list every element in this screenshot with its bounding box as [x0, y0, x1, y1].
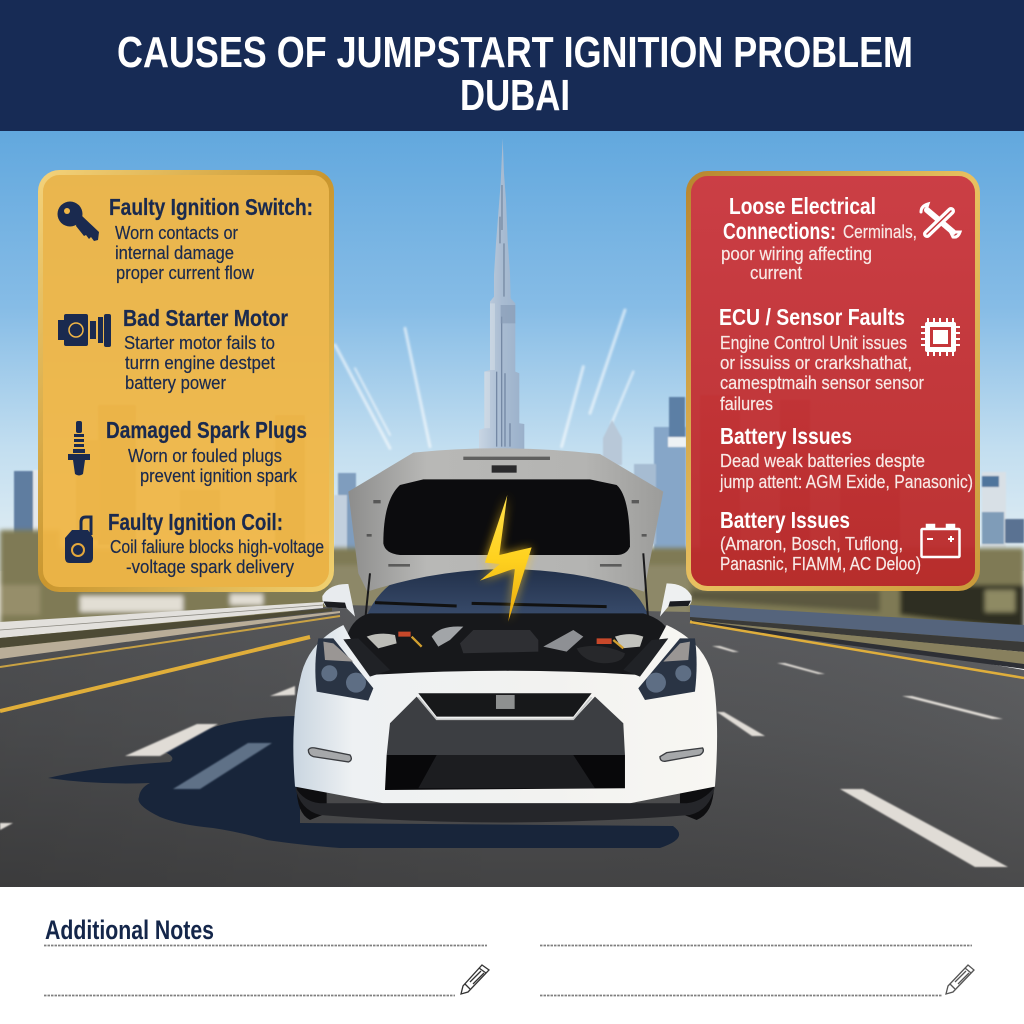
icon: pencil left	[461, 965, 489, 994]
text: ignition coil description	[110, 536, 324, 577]
fog lights	[308, 748, 703, 762]
text: ignition switch description	[115, 222, 255, 283]
icon: key	[58, 202, 99, 241]
sports car with open hood	[293, 448, 717, 822]
lane dashes	[0, 646, 1008, 867]
text: ignition coil description: -voltage spark delivery	[126, 556, 295, 577]
text: battery brands: Panasnic, FIAMM, AC Deloo)	[720, 553, 921, 574]
headlights	[315, 638, 697, 701]
city skyline	[14, 395, 1024, 573]
text: ecu description: failures	[720, 393, 773, 414]
note lines	[44, 946, 972, 996]
white body	[293, 625, 717, 803]
road surface	[0, 605, 1024, 887]
text: spark plugs description: prevent ignition spark	[140, 465, 298, 486]
car shadow on road	[48, 716, 679, 848]
text: starter motor description	[124, 332, 275, 393]
icon: ignition coil	[65, 517, 93, 563]
text: ecu description: Engine Control Unit issues	[720, 332, 907, 353]
tyres	[297, 787, 714, 820]
engine bay	[347, 613, 670, 675]
heading: loose electrical connections	[723, 193, 876, 244]
sky background	[0, 131, 1024, 571]
icon: starter motor	[58, 314, 111, 347]
icon: pencil right	[946, 965, 974, 994]
left roadside barrier and shoulder	[0, 602, 340, 711]
heading: ecu sensor faults: ECU / Sensor Faults	[719, 304, 905, 330]
text: spark plugs description	[128, 445, 298, 486]
text: ignition switch description: Worn contacts or	[115, 222, 238, 243]
heading: battery issues: Battery Issues	[720, 423, 852, 449]
panel: left causes	[40, 172, 332, 590]
text: starter motor description: battery power	[125, 372, 226, 393]
text: ecu description	[720, 332, 924, 414]
panel: additional notes	[0, 887, 1024, 1024]
text: battery issues description	[719, 450, 973, 492]
text: ignition switch description: internal damage	[115, 242, 234, 263]
mirrors	[322, 583, 692, 617]
heading: faulty ignition coil: Faulty Ignition Coil:	[108, 509, 283, 535]
lightning bolt glow	[480, 495, 532, 622]
icon: battery	[922, 525, 960, 557]
front splitter	[295, 787, 715, 822]
text: ignition switch description: proper current flow	[116, 262, 255, 283]
open hood	[348, 448, 663, 592]
heading: loose electrical connections: Loose Electrical	[729, 193, 876, 219]
heading: damaged spark plugs: Damaged Spark Plugs	[106, 417, 307, 443]
lightning bolt	[480, 495, 532, 622]
icon: microchip	[921, 318, 960, 356]
front grille	[385, 693, 625, 790]
text: ignition coil description: Coil faliure blocks high-voltage	[110, 536, 324, 557]
text: battery issues description: jump attent: AGM Exide, Panasonic)	[719, 471, 973, 492]
heading: battery issues brands: Battery Issues	[720, 507, 850, 533]
text: starter motor description: turrn engine destpet	[125, 352, 275, 373]
icon: spark plug	[68, 421, 90, 476]
icon: crossed wrench and screwdriver	[921, 204, 960, 237]
title	[117, 29, 913, 120]
text: battery brands	[720, 533, 921, 574]
heading: additional notes: Additional Notes	[45, 915, 214, 945]
right roadside guardrail and lane line	[690, 605, 1024, 678]
desert ground band	[0, 530, 1024, 650]
heading: loose electrical connections: Connections:	[723, 218, 836, 244]
text: loose connections description: poor wiring affecting	[721, 243, 872, 264]
text: battery issues description: Dead weak batteries despte	[720, 450, 925, 471]
hood struts	[365, 553, 648, 622]
text: spark plugs description: Worn or fouled plugs	[128, 445, 282, 466]
title: DUBAI	[460, 72, 570, 120]
text: loose connections description	[721, 221, 917, 283]
text: starter motor description: Starter motor fails to	[124, 332, 275, 353]
wipers	[375, 603, 607, 607]
text: battery brands: (Amaron, Bosch, Tuflong,	[720, 533, 903, 554]
text: loose connections description: current	[750, 262, 802, 283]
panel: right causes	[688, 174, 978, 588]
heading: faulty ignition switch: Faulty Ignition Switch:	[109, 194, 313, 220]
text: loose connections description: Cerminals,	[843, 221, 917, 242]
contrails and Burj Khalifa tower	[335, 138, 633, 450]
heading: bad starter motor: Bad Starter Motor	[123, 305, 288, 331]
text: ecu description: or issuiss or crarkshathat,	[720, 352, 912, 373]
header banner	[0, 0, 1024, 131]
dark hood-edge trim	[343, 638, 668, 677]
text: ecu description: camesptmaih sensor sensor	[720, 372, 924, 393]
windshield	[365, 561, 650, 620]
